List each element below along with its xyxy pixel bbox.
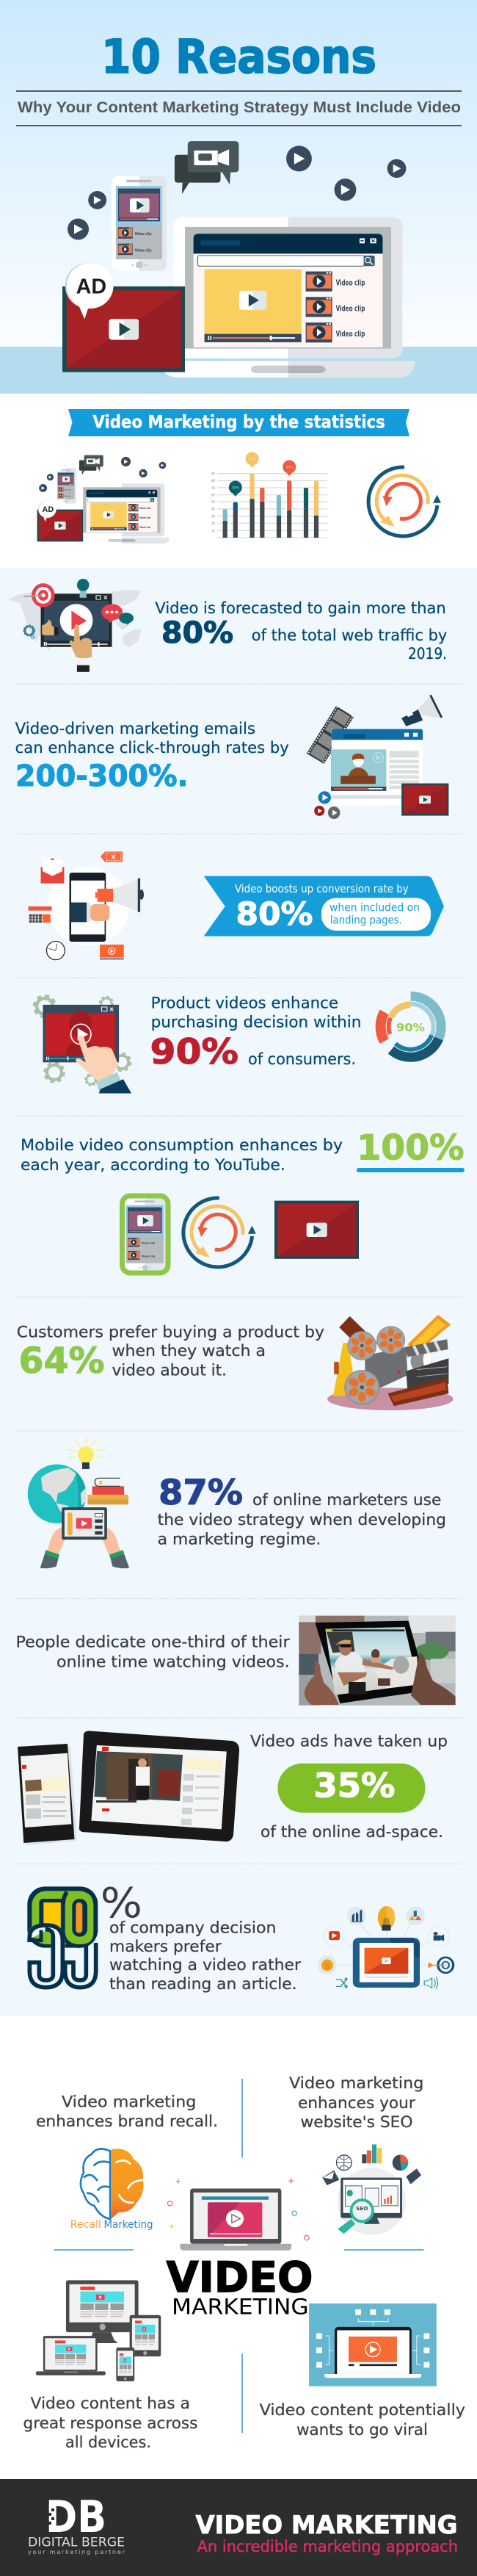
icon: cycle arrows: [368, 467, 441, 536]
icon: SEO monitor and magnifier: SEO: [356, 2206, 368, 2212]
panel: stat 10 decision makers: [27, 1880, 454, 1993]
callout: arrow ribbon: [204, 876, 444, 936]
title: 10 Reasons: [101, 30, 376, 84]
text: reading an article: than reading an article.: [109, 1975, 297, 1993]
chart: bar chart with pins: 80%: [286, 466, 294, 470]
stat: 80%: 80%: [236, 896, 313, 933]
text: video about it: video about it.: [112, 1362, 227, 1379]
icon: phone in green frame: [122, 1196, 168, 1273]
icon: responsive devices: [36, 2280, 161, 2381]
icon: video ad box: [274, 1201, 359, 1259]
text: video strategy: the video strategy when developing: [158, 1511, 446, 1529]
text: makers prefer: makers prefer: [109, 1938, 222, 1955]
panel: stat 8 online time: [16, 1616, 456, 1706]
icon: laptop with video player: Video clip: [336, 303, 365, 313]
text: ad-space line: of the online ad-space.: [261, 1823, 443, 1841]
icon: video presenter window with film and megaphone: [307, 695, 448, 819]
text: all devices: great response across: [23, 2414, 197, 2432]
text: website SEO: website's SEO: [301, 2113, 412, 2131]
text: of consumers: of consumers.: [248, 1050, 356, 1068]
chart: bar chart with pins: 70: [211, 486, 216, 490]
text: one-third line 1: People dedicate one-third of their: [16, 1634, 290, 1651]
icon: viral video laptop: [309, 2303, 437, 2386]
text: website SEO: Video marketing: [289, 2074, 423, 2092]
panel: stat 5 mobile video: [21, 1128, 465, 1273]
text: video ads line: Video ads have taken up: [250, 1732, 448, 1750]
stat: 90%: 90%: [150, 1032, 238, 1072]
stat: 87%: 87%: [159, 1473, 243, 1513]
icon: recall brain: [70, 2149, 153, 2231]
heading: VIDEO MARKETING: VIDEO: [166, 2254, 313, 2302]
icon: video with radiating marketing icons: $: [324, 1963, 330, 1971]
panel: stat 7 marketers 87%: [28, 1437, 446, 1568]
text: all devices: [23, 2395, 197, 2451]
chart: bar chart with pins: 10: [211, 529, 216, 533]
text: watch line: when they watch a: [112, 1342, 266, 1360]
text pill: landing pages: landing pages.: [330, 914, 402, 927]
text: marketing regime: a marketing regime.: [158, 1531, 321, 1548]
logo: Digital Berge: your marketing partner: [28, 2549, 125, 2555]
panel: stat 1 web traffic: [8, 579, 447, 672]
text: brand recall: enhances brand recall.: [36, 2113, 218, 2130]
icon: AD speech bubble: AD: [76, 274, 106, 298]
stat: 64%: 64%: [19, 1341, 104, 1382]
text: brand recall: [36, 2093, 218, 2130]
photo: hands holding a tablet: [299, 1616, 456, 1706]
icon: SEO monitor and magnifier: [322, 2144, 421, 2235]
text pill: landing pages: [321, 898, 431, 931]
subtitle with rules: Why Your Content Marketing Strategy Must Include Video: [18, 99, 461, 116]
logo: Digital Berge: [28, 2492, 125, 2555]
text: online marketers: of online marketers use: [252, 1491, 441, 1509]
text: email line 1: Video-driven marketing emails: [15, 720, 255, 737]
icon: video with radiating marketing icons: [318, 1906, 454, 1989]
logo: Digital Berge: DIGITAL BERGE: [28, 2536, 125, 2550]
stat: 100% with underline: 100%: [357, 1128, 464, 1168]
icon: phone: [112, 176, 167, 271]
icon: film projector: [327, 1315, 454, 1410]
text: forecast line: Video is forecasted to gain more than: [155, 599, 446, 617]
stat: stylised 59: [27, 1880, 142, 1989]
photo: phone and tablet showing video: [18, 1731, 239, 1845]
hero illustration: [62, 141, 415, 378]
stat pill: 35%: 35%: [314, 1767, 395, 1805]
icon: red video ad: [62, 286, 185, 372]
tagline: An incredible marketing approach: [197, 2538, 458, 2555]
icon: central laptop with sparkles: [167, 2178, 309, 2251]
logo: Digital Berge: DB: [45, 2492, 106, 2543]
icon: video over world map: [8, 579, 142, 672]
text: one-third line 2: online time watching videos.: [57, 1653, 290, 1670]
chart: bar chart with pins: 20: [211, 522, 216, 525]
icon: laptop with video player: [164, 217, 415, 378]
text: brand recall: Video marketing: [62, 2093, 196, 2111]
text: website SEO: enhances your: [298, 2094, 415, 2112]
header background: [0, 0, 477, 394]
chart: bar chart with pins: 60: [211, 494, 216, 497]
panel: stat 3 conversion rate: [29, 851, 444, 962]
icon: AD speech bubble: [65, 263, 114, 320]
chart: bar chart with pins: [211, 452, 327, 538]
icon: video window with hand and gears: [34, 996, 131, 1093]
stat: 200-300%: 200-300%.: [15, 760, 188, 793]
panel: statistics heading: [68, 409, 409, 436]
icon: recall brain: Recall: [70, 2219, 101, 2231]
chart: bar chart with pins: 80: [211, 479, 216, 483]
text: website SEO: [289, 2074, 423, 2131]
text: go viral: Video content potentially: [260, 2401, 465, 2419]
text: all devices: all devices.: [65, 2434, 151, 2451]
text: email line 2: can enhance click-through rates by: [15, 739, 289, 757]
chart: bar chart with pins: 90: [211, 472, 216, 476]
stat pill: 35%: [277, 1764, 426, 1813]
icon: cycle arrows small: [183, 1198, 256, 1267]
stat: 80%: 80%: [161, 616, 233, 650]
icon: phone: Video clip: [135, 249, 152, 253]
text: mobile line 1: Mobile video consumption enhances by: [21, 1136, 343, 1154]
panel: footer: [0, 2479, 477, 2576]
text: all devices: Video content has a: [31, 2395, 190, 2412]
text: year: 2019.: [408, 645, 447, 663]
chart: bar chart with pins: 50: [211, 500, 216, 504]
icon: mini hero illustration: [37, 455, 170, 544]
chart: bar chart with pins: 30: [211, 514, 216, 519]
panel: video marketing summary: [23, 2074, 465, 2451]
quadrant dividers: [54, 2079, 423, 2433]
icon: floating play buttons: [68, 145, 406, 239]
icon: globe, tablet, books and bulb: [28, 1437, 129, 1568]
chart: donut 90%: 90%: [396, 1021, 425, 1034]
icon: laptop with video player: Video clip: [336, 329, 365, 339]
text: watching a video: watching a video rather: [109, 1956, 301, 1974]
text: product videos line 2: purchasing decision within: [151, 1014, 361, 1031]
text: customers line: Customers prefer buying a product by: [17, 1324, 324, 1341]
icon: video chat bubbles: [175, 141, 238, 194]
text pill: landing pages: when included on: [329, 901, 420, 914]
stat: stylised 59: %: [101, 1880, 142, 1927]
panel: stat 4 purchasing decision: [34, 995, 441, 1093]
icon: phone with megaphone: [29, 851, 144, 962]
text: of total traffic: of the total web traffic by: [252, 627, 447, 644]
text: conversion line: Video boosts up conversion rate by: [235, 882, 409, 895]
heading: footer video marketing: VIDEO MARKETING: [195, 2511, 458, 2540]
chart: donut 90%: [380, 996, 441, 1057]
chart: bar chart with pins: 50%: [232, 486, 240, 491]
stats panel background: [0, 568, 477, 2016]
icon: phone: Video clip: [135, 232, 152, 237]
text: mobile line 2: each year, according to YouTube.: [21, 1156, 285, 1174]
icon: laptop with video player: Video clip: [336, 278, 365, 287]
text: product videos line 1: Product videos enhance: [151, 995, 338, 1012]
heading: VIDEO MARKETING: MARKETING: [172, 2294, 309, 2319]
icon: recall brain: Marketing: [104, 2219, 153, 2231]
text: go viral: wants to go viral: [296, 2421, 428, 2439]
chart: bar chart with pins: 40: [211, 507, 216, 511]
chart: bar chart with pins: 90%: [249, 457, 257, 461]
text: company decision: of company decision: [109, 1919, 276, 1937]
panel: stat 6 customers 64%: [17, 1315, 454, 1410]
text: go viral: [260, 2401, 465, 2439]
panel: statistics heading: Video Marketing by the statistics: [92, 411, 385, 432]
panel: stat 2 email click-through: [15, 695, 448, 819]
panel: stat 9 video ads: [18, 1731, 448, 1845]
